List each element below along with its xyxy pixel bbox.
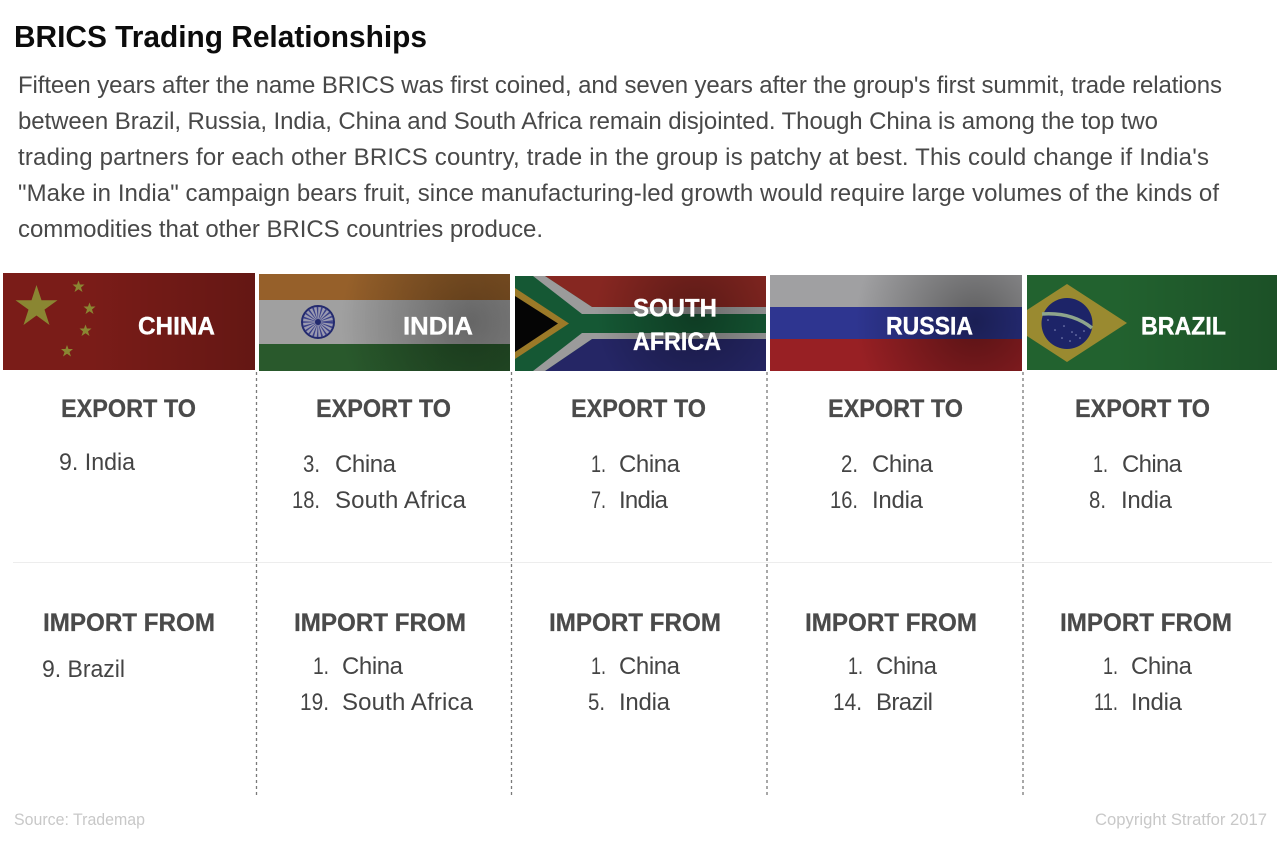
intro paragraph: Fifteen years after the name BRICS was first coined, and seven years after the group's first summit, trade relations: [18, 72, 1222, 99]
copyright note: Copyright Stratfor 2017: [1095, 810, 1267, 829]
list: India import: 1.: [313, 653, 329, 680]
list: India export: 3.: [303, 451, 320, 478]
heading: India import: IMPORT FROM: [294, 609, 466, 637]
heading: Russia export: EXPORT TO: [828, 395, 963, 423]
list: Russia export: China: [872, 451, 934, 478]
list: Russia export: 16.: [830, 487, 858, 514]
intro paragraph: trading partners for each other BRICS country, trade in the group is patchy at best. This could change if India's: [18, 144, 1209, 171]
list: Russia export: 2.: [841, 451, 858, 478]
list: Brazil import: China: [1131, 653, 1193, 680]
flag: India: INDIA: [403, 312, 473, 340]
title: BRICS Trading Relationships: [14, 19, 427, 54]
list: India export: [292, 451, 467, 514]
list: Brazil export: 8.: [1089, 487, 1106, 514]
heading: Brazil import: IMPORT FROM: [1060, 609, 1232, 637]
list: South Africa export: 7.: [591, 487, 606, 514]
flag: China: [3, 273, 255, 370]
intro paragraph: [18, 72, 1222, 243]
heading: South Africa export: EXPORT TO: [571, 395, 706, 423]
list: Brazil import: [1094, 653, 1193, 716]
list: South Africa import: [588, 653, 681, 716]
list: Russia export: [830, 451, 934, 514]
list: India import: South Africa: [342, 689, 474, 716]
flag name: South Africa: SOUTH: [633, 294, 717, 322]
panel: China: [3, 273, 255, 683]
list: Russia import: China: [876, 653, 938, 680]
list: Brazil export: 1.: [1093, 451, 1108, 478]
list: India export: China: [335, 451, 397, 478]
flag: Russia: [770, 275, 1022, 371]
list: India import: 19.: [300, 689, 329, 716]
heading: Brazil export: EXPORT TO: [1075, 395, 1210, 423]
list: South Africa export: China: [619, 451, 681, 478]
flag: Brazil: BRAZIL: [1141, 312, 1226, 340]
panel: Brazil: [1027, 275, 1277, 716]
list: Brazil import: 1.: [1103, 653, 1118, 680]
heading: India export: EXPORT TO: [316, 395, 451, 423]
list: China export: 9. India: [59, 449, 136, 476]
panel: South Africa: [515, 276, 766, 716]
intro paragraph: between Brazil, Russia, India, China and South Africa remain disjointed. Though China is among the top two: [18, 108, 1158, 135]
flag: South Africa: [515, 276, 766, 371]
list: India import: China: [342, 653, 404, 680]
list: Russia import: Brazil: [876, 689, 933, 716]
panel: Russia: [770, 275, 1022, 716]
flag: Brazil: [1027, 275, 1277, 370]
panel: India: [259, 274, 510, 716]
list: Russia import: [833, 653, 938, 716]
intro paragraph: commodities that other BRICS countries produce.: [18, 216, 543, 243]
list: Brazil export: India: [1121, 487, 1173, 514]
flag: India: [259, 274, 510, 371]
list: India import: [300, 653, 474, 716]
flag name: South Africa: [633, 294, 721, 356]
heading: Russia import: IMPORT FROM: [805, 609, 977, 637]
heading: South Africa import: IMPORT FROM: [549, 609, 721, 637]
list: India export: 18.: [292, 487, 320, 514]
list: Russia import: 14.: [833, 689, 862, 716]
list: Brazil export: [1089, 451, 1183, 514]
list: Brazil import: 11.: [1094, 689, 1118, 716]
list: South Africa import: 5.: [588, 689, 605, 716]
list: India export: South Africa: [335, 487, 467, 514]
flag name: South Africa: AFRICA: [633, 328, 721, 356]
list: South Africa export: 1.: [591, 451, 606, 478]
intro paragraph: "Make in India" campaign bears fruit, since manufacturing-led growth would require large volumes of the kinds of: [18, 180, 1219, 207]
list: Brazil export: China: [1122, 451, 1183, 478]
list: South Africa import: China: [619, 653, 681, 680]
list: Brazil import: India: [1131, 689, 1183, 716]
list: South Africa export: India: [619, 487, 669, 514]
list: South Africa export: [591, 451, 681, 514]
list: China import: 9. Brazil: [42, 656, 125, 683]
list: Russia export: India: [872, 487, 924, 514]
list: Russia import: 1.: [848, 653, 863, 680]
heading: China import: IMPORT FROM: [43, 609, 215, 637]
heading: China export: EXPORT TO: [61, 395, 196, 423]
flag: China: CHINA: [138, 312, 215, 340]
source note: Source: Trademap: [14, 810, 145, 829]
flag: Russia: RUSSIA: [886, 312, 973, 340]
list: South Africa import: 1.: [591, 653, 606, 680]
list: South Africa import: India: [619, 689, 671, 716]
